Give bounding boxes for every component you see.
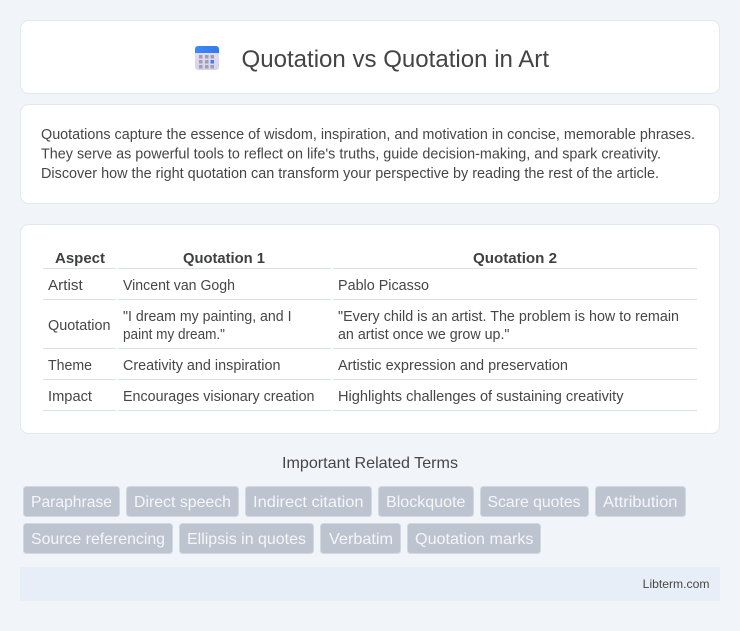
text block: introduction: They serve as powerful tools to reflect on life's truths, guide decision-making, and spark creativity. <box>41 146 661 162</box>
panel: footer <box>20 567 720 601</box>
tag: Blockquote <box>378 486 474 516</box>
row: impact <box>48 389 624 405</box>
tag: Attribution: Attribution <box>603 494 678 511</box>
row: theme: Creativity and inspiration <box>123 358 280 374</box>
tag: Direct speech: Direct speech <box>134 494 231 511</box>
panel: comparison table <box>20 224 720 434</box>
table header: Quotation 1 <box>183 250 265 267</box>
row: impact: Highlights challenges of sustaining creativity <box>338 389 624 405</box>
row: artist: Artist <box>48 278 83 294</box>
text block: introduction: Quotations capture the essence of wisdom, inspiration, and motivation in concise, memorable phrases. <box>41 127 695 143</box>
row: impact: Encourages visionary creation <box>123 389 314 405</box>
row: quotation: paint my dream." <box>123 327 225 343</box>
row: artist <box>48 278 429 294</box>
text block: introduction: Discover how the right quotation can transform your perspective by reading the rest of the article. <box>41 166 659 182</box>
table header: Aspect <box>55 250 105 267</box>
tag: Indirect citation: Indirect citation <box>253 494 364 511</box>
panel: related term tags <box>24 486 686 554</box>
tag: Source referencing: Source referencing <box>31 531 165 548</box>
tag: Verbatim <box>320 524 400 554</box>
row: quotation: "I dream my painting, and I <box>123 309 292 325</box>
footer source text: Libterm.com <box>643 577 710 591</box>
tag: Indirect citation <box>246 486 372 516</box>
row: theme: Theme <box>48 358 92 374</box>
icon: calendar <box>195 46 219 70</box>
row: quotation: Quotation <box>48 318 110 334</box>
text block: introduction <box>41 127 695 182</box>
panel: header <box>20 20 720 94</box>
row: quotation: an artist once we grow up." <box>338 327 510 343</box>
tag: Quotation marks <box>408 524 540 554</box>
row: artist: Pablo Picasso <box>338 278 429 294</box>
row: impact: Impact <box>48 389 92 405</box>
title: Quotation vs Quotation in Art <box>242 46 549 73</box>
table header: Quotation 2 <box>473 250 557 267</box>
row: theme <box>48 358 568 374</box>
row: artist: Vincent van Gogh <box>123 278 235 294</box>
row: quotation <box>48 309 679 343</box>
heading: related terms: Important Related Terms <box>282 455 458 472</box>
tag: Verbatim: Verbatim <box>329 531 393 548</box>
tag: Ellipsis in quotes: Ellipsis in quotes <box>187 531 306 548</box>
tag: Source referencing <box>24 524 172 554</box>
tag: Paraphrase: Paraphrase <box>31 494 112 511</box>
tag: Blockquote: Blockquote <box>386 494 466 511</box>
tag: Scare quotes <box>480 486 588 516</box>
tag: Quotation marks: Quotation marks <box>415 531 534 548</box>
row: quotation: "Every child is an artist. The problem is how to remain <box>338 309 679 325</box>
tag: Scare quotes: Scare quotes <box>488 494 580 511</box>
tag: Ellipsis in quotes <box>180 524 314 554</box>
panel: introduction <box>20 104 720 204</box>
row: theme: Artistic expression and preservation <box>338 358 568 374</box>
tag: Direct speech <box>126 486 238 516</box>
tag: Attribution <box>596 486 686 516</box>
tag: Paraphrase <box>24 486 120 516</box>
table header <box>55 250 557 267</box>
